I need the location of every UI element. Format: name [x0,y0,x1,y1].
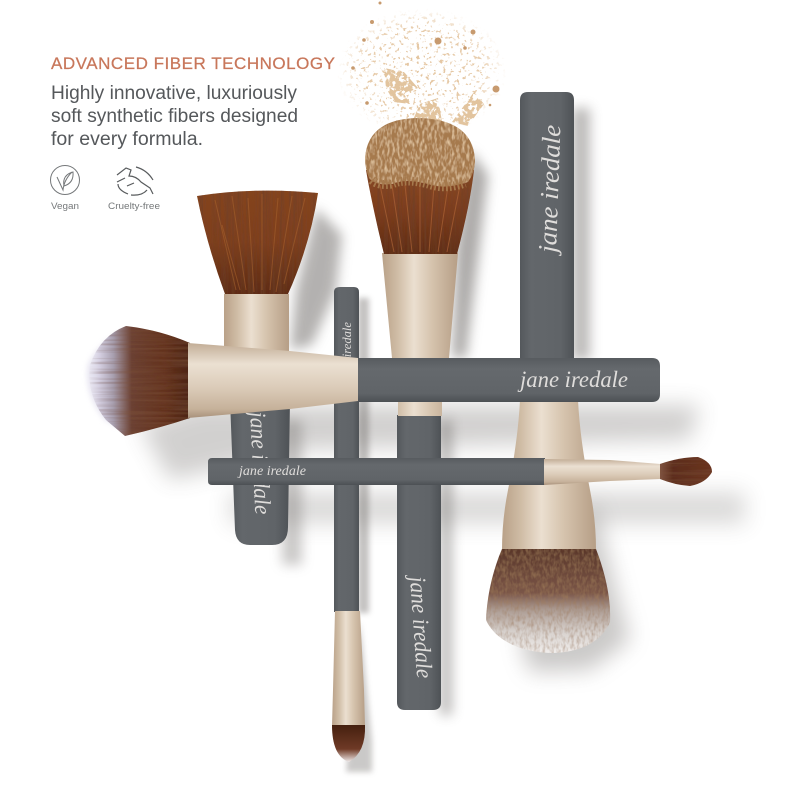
handle [230,400,290,545]
brush: center foundation brush with powder [365,118,475,710]
icon: cruelty-free leaping rabbit [117,167,153,195]
label: cruelty-free: Cruelty-free [108,201,160,212]
brush: large horizontal fan-shaped powder brush [87,326,660,436]
bristles [332,725,365,762]
handle [397,415,441,710]
bristle highlights [215,194,305,292]
ferrule [544,459,661,485]
ferrule [332,611,365,726]
powder-coated bristle tops [365,118,475,187]
handle [208,458,545,485]
handle [334,287,359,612]
logo: jane iredale [517,367,628,392]
logo: jane iredale [339,322,354,384]
handle [358,358,660,402]
logo: jane iredale [237,463,306,478]
logo: jane iredale [405,573,437,679]
bristles [486,549,610,653]
body text [51,83,298,150]
bristles [89,326,190,436]
icon: vegan leaf [50,166,80,194]
heading: ADVANCED FIBER TECHNOLOGY [51,54,335,73]
label: vegan: Vegan [51,201,79,212]
soft drop shadows [140,108,745,772]
brush: slim horizontal eye brush [208,457,712,486]
logo: jane iredale [533,124,566,256]
ferrule [224,294,289,352]
brush: flat top kabuki, bristles upward [197,191,318,545]
body text: soft synthetic fibers designed [51,106,298,127]
bristle tip glow [87,330,130,432]
brush: slim vertical with small tip [332,287,365,762]
handle [520,92,574,365]
bristles [197,191,318,294]
bristles brown [366,170,474,254]
logo: jane iredale [245,408,275,515]
body text: for every formula. [51,129,203,150]
ferrule [382,253,458,416]
bristle highlights [380,185,460,252]
body text: Highly innovative, luxuriously [51,83,297,104]
ferrule [188,343,358,418]
bristles [660,457,712,486]
powder: scattered dust [337,2,507,136]
ferrule [502,400,596,550]
powder fringe on bristles [372,180,465,187]
brush: right large handle with angled white tip [486,92,610,653]
